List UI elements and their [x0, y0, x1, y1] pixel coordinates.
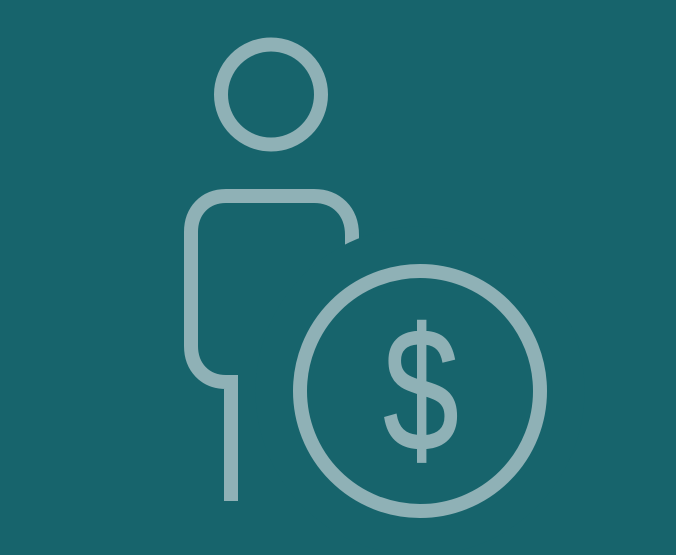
icon: dollar sign: $: [383, 292, 459, 488]
icon: coin: [300, 271, 540, 511]
icon: person head: [221, 44, 321, 144]
icon: person body: [191, 196, 352, 501]
